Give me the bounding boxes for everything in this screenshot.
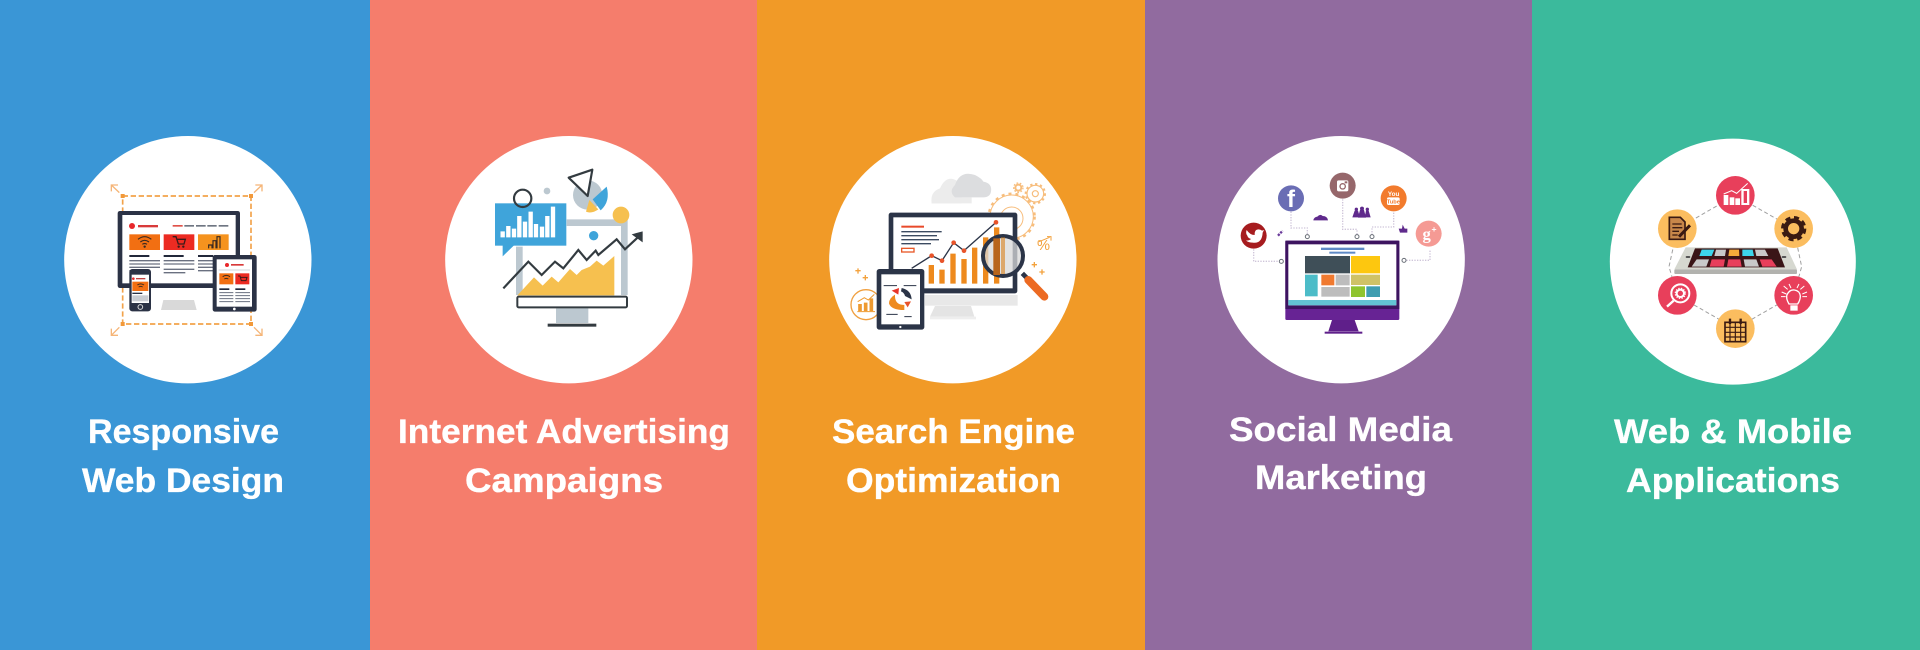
heading: Responsive Web Design: Responsive [88,413,279,451]
heading: Search Engine Optimization: Optimization [846,462,1061,500]
panel background coral [370,0,757,650]
icon: gears [989,183,1045,240]
heading: Web & Mobile Applications [1614,413,1852,500]
icon: gear badge [1774,209,1813,248]
icon: smartphone with app tiles [1674,247,1797,274]
icon: monitor with area chart [517,223,627,327]
white circle and social media icon [1217,136,1465,383]
icon: facebook badge [1278,185,1304,213]
icon: tablet with donut chart [877,269,924,330]
icon: smartphone [129,269,151,311]
icon: google plus badge [1416,221,1442,247]
heading: Internet Advertising Campaigns: Internet Advertising [398,413,730,451]
icon: dashed resize frame with arrows [111,185,262,335]
heading: Social Media Marketing [1229,411,1453,497]
heading: Web & Mobile Applications: Web & Mobile [1614,413,1852,451]
panel: responsive web design [0,0,370,650]
icon: youtube badge: Tube [1387,199,1400,205]
icon: clouds [931,174,991,203]
panel: search engine optimization [757,0,1145,650]
heading: Social Media Marketing: Social Media [1229,411,1453,449]
icon: search gear badge [1658,276,1697,315]
icon: google plus badge: g [1423,224,1432,243]
icon: sparkles [855,262,1045,280]
heading: Responsive Web Design: Web Design [82,462,284,500]
icon: circled mini chart [851,290,881,320]
icon: small purple glyphs [1278,207,1407,236]
heading: Social Media Marketing: Marketing [1255,459,1427,497]
heading: Internet Advertising Campaigns: Campaigns [465,462,663,500]
panel: web and mobile applications [1532,0,1920,650]
heading: Search Engine Optimization: Search Engine [832,413,1075,451]
icon: monitor with bar chart [889,213,1018,319]
heading: Search Engine Optimization [832,413,1075,500]
icon: twitter badge [1241,223,1267,249]
panel background orange [757,0,1145,650]
icon: tablet [213,255,257,312]
white circle and mobile apps icon [1610,139,1856,385]
heading: Internet Advertising Campaigns [398,413,730,500]
icon: google plus badge: + [1431,224,1437,234]
panel: social media marketing [1145,0,1532,650]
icon: pie chart [569,170,608,212]
icon: dashed hexagon ring [1669,195,1802,329]
panel: internet advertising campaigns [370,0,757,650]
heading: Responsive Web Design [82,413,284,500]
heading: Web & Mobile Applications: Applications [1626,462,1840,500]
icon: speech bubble bar chart [495,203,566,256]
white circle and responsive devices icon [64,136,311,383]
icon: document badge [1658,209,1697,248]
icon: youtube badge [1381,185,1407,211]
panel background blue [0,0,370,650]
icon: magnifying glass [983,236,1045,297]
icon: connector nodes [1279,235,1406,263]
icon: lightbulb badge [1774,276,1813,315]
icon: desktop monitor [118,211,240,310]
icon: facebook badge: f [1287,186,1296,213]
icon: calendar badge [1716,309,1755,348]
panel background teal [1532,0,1920,650]
white circle and SEO icon [829,136,1076,383]
icon: rising trend arrow [503,231,643,288]
white circle and advertising chart icon [445,136,692,383]
panel background purple [1145,0,1532,650]
icon: decorative dots [514,188,629,240]
icon: instagram badge [1330,173,1356,199]
icon: dotted connectors [1254,199,1430,261]
icon: youtube badge: You [1388,191,1400,198]
icon: analytics badge [1716,176,1755,215]
icon: percent sign: % [1037,238,1050,254]
icon: purple monitor [1285,241,1399,334]
